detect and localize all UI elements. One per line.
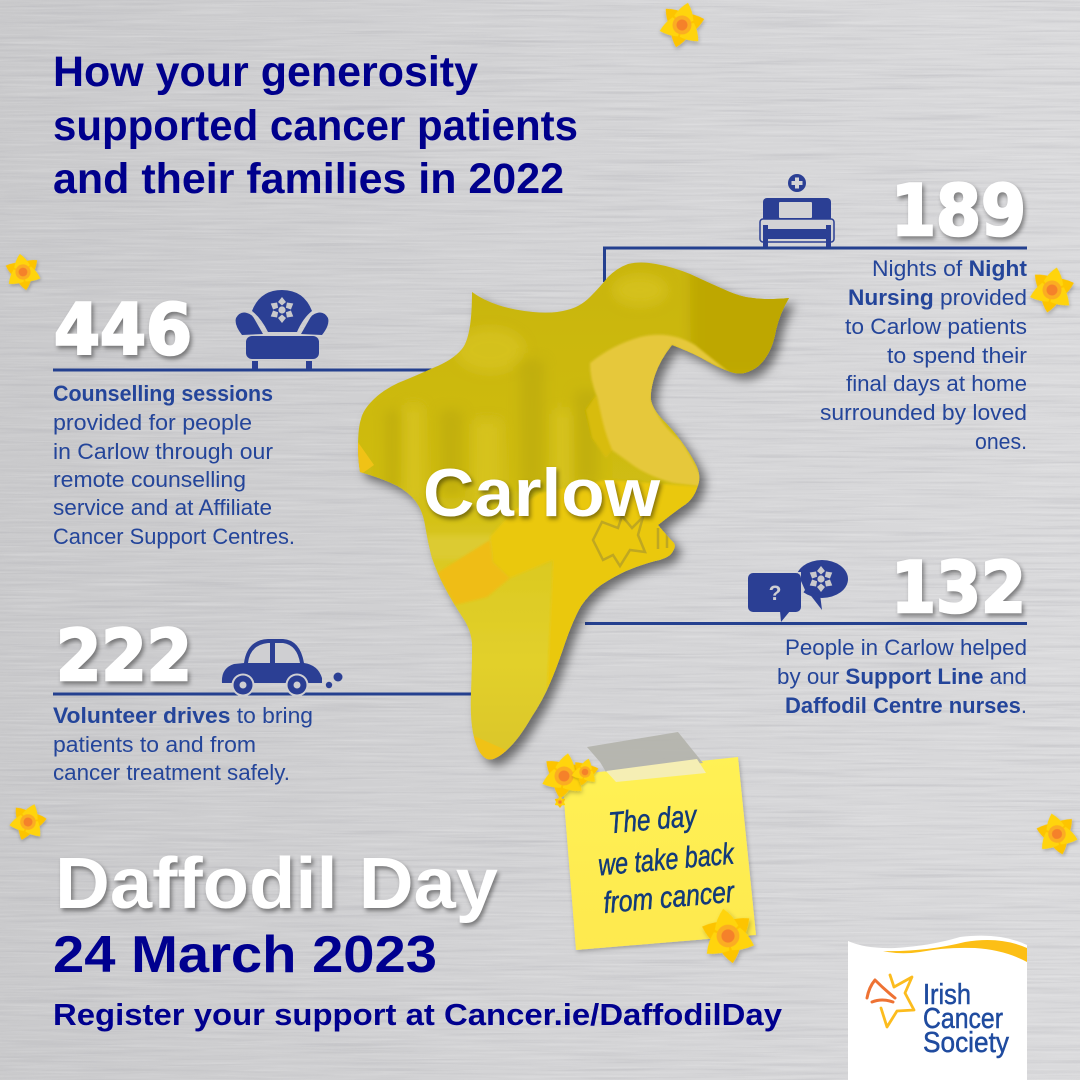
night nursing text: to Carlow patients: [845, 314, 1027, 339]
number 132: 132: [891, 547, 1026, 629]
stat: 446 counselling: [53, 289, 328, 549]
icon: armchair: [236, 290, 328, 369]
volunteer drives text: [53, 703, 313, 785]
night nursing text: to spend their: [887, 343, 1027, 368]
Daffodil Day heading: Daffodil Day: [55, 844, 498, 924]
photo: hair: [590, 335, 730, 487]
photo: arm: [437, 540, 510, 605]
Carlow county map with photo: [350, 255, 795, 765]
night nursing text: ones.: [975, 429, 1027, 454]
number 189: 189: [891, 170, 1026, 252]
icon: car: [222, 639, 342, 696]
title: [53, 48, 578, 203]
stat: 222 volunteer drives: [53, 615, 342, 785]
logo wordmark: Cancer: [923, 1003, 1003, 1035]
counselling text: [53, 381, 295, 549]
logo flower: [867, 975, 914, 1027]
number 446: 446: [54, 289, 192, 371]
logo panel: [848, 936, 1027, 1080]
note paper: [562, 757, 756, 950]
support line text: Daffodil Centre nurses.: [785, 693, 1027, 718]
support line text: People in Carlow helped: [785, 635, 1027, 660]
number 222: 222: [56, 615, 192, 697]
icon: speech bubbles: ?: [769, 582, 781, 605]
volunteer drives text: Volunteer drives to bring: [53, 703, 313, 728]
handwritten note text: The day: [607, 800, 699, 840]
icon: speech bubbles: [748, 560, 848, 622]
photo: foliage and trees: [385, 262, 795, 560]
title: How your generosity: [53, 48, 478, 96]
photo: small edge details: [352, 438, 508, 765]
stat: 132 support line: [748, 547, 1027, 718]
photo: shirt daffodil logo: [593, 516, 667, 566]
handwritten note text: from cancer: [602, 876, 736, 920]
support line text: by our Support Line and: [777, 664, 1027, 689]
yellow swoosh: [883, 940, 1027, 962]
counselling text: remote counselling: [53, 467, 246, 492]
night nursing text: surrounded by loved: [820, 400, 1027, 425]
night nursing text: Nursing provided: [848, 285, 1027, 310]
logo wordmark: Irish: [923, 979, 971, 1011]
connector: volunteer drives line: [53, 692, 473, 696]
handwritten note text: [593, 797, 740, 920]
night nursing text: final days at home: [846, 371, 1027, 396]
volunteer drives text: cancer treatment safely.: [53, 760, 290, 785]
icon: hospital bed: [760, 174, 834, 247]
connector: night nursing line: [604, 248, 1027, 282]
tape: [587, 732, 706, 782]
title: supported cancer patients: [53, 102, 578, 150]
white wave panel: [848, 936, 1027, 1080]
photo: face: [586, 395, 616, 458]
night nursing text: Nights of Night: [872, 256, 1028, 281]
counselling text: Cancer Support Centres.: [53, 524, 295, 549]
connector: counselling line: [53, 368, 455, 372]
event date: 24 March 2023: [53, 926, 437, 984]
night nursing text: [820, 256, 1028, 454]
photo: yellow t-shirt: [490, 480, 705, 693]
logo wordmark: Society: [923, 1027, 1009, 1059]
handwritten note text: we take back: [597, 837, 737, 882]
call to action: Register your support at Cancer.ie/DaffodilDay: [53, 997, 783, 1032]
counselling text: Counselling sessions: [53, 381, 273, 406]
support line text: [777, 635, 1027, 718]
counselling text: in Carlow through our: [53, 439, 273, 464]
connector: support line: [585, 622, 1027, 625]
note daffodils: [535, 749, 762, 968]
logo wordmark: [923, 979, 1009, 1059]
title: and their families in 2022: [53, 155, 564, 203]
decorative daffodils: [0, 0, 1080, 860]
counselling text: provided for people: [53, 410, 252, 435]
sticky note: [535, 732, 762, 968]
Carlow label: Carlow: [423, 455, 661, 531]
volunteer drives text: patients to and from: [53, 732, 256, 757]
counselling text: service and at Affiliate: [53, 495, 272, 520]
stat: 189 night nursing: [760, 170, 1028, 454]
